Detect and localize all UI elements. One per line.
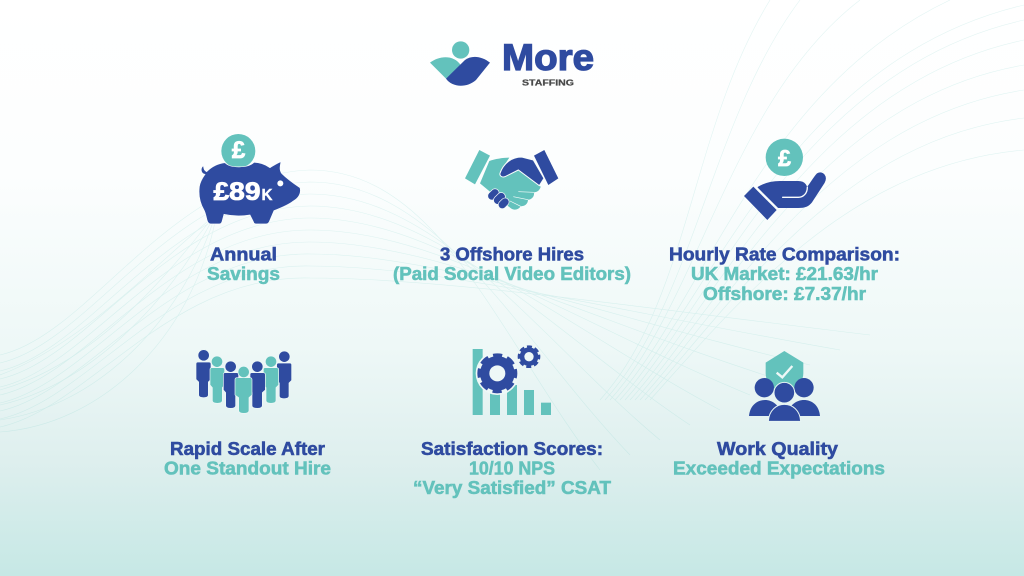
label: hourly rate comparison: Offshore: £7.37/hr <box>703 284 866 304</box>
label: work quality: Exceeded Expectations <box>673 458 885 478</box>
icon: piggy bank with coin: £ <box>232 137 246 164</box>
label: work quality <box>673 439 885 478</box>
label: offshore hires <box>393 244 631 284</box>
icon: piggy bank with coin <box>199 134 300 224</box>
label: hourly rate comparison: Hourly Rate Comparison: <box>669 244 900 264</box>
label: satisfaction scores: 10/10 NPS <box>469 458 555 478</box>
icon: group of people <box>196 350 292 413</box>
icon: bar chart with gears <box>473 347 551 415</box>
icon: hand holding pound coin: £ <box>778 145 791 171</box>
label: annual savings: Annual <box>210 244 277 264</box>
label: annual savings: Savings <box>207 264 280 284</box>
label: rapid scale: Rapid Scale After <box>170 439 325 459</box>
icon: team with shield <box>749 351 820 421</box>
icon: logo mark <box>430 41 490 86</box>
label: work quality: Work Quality <box>717 439 838 459</box>
label: satisfaction scores: “Very Satisfied” CSAT <box>413 478 611 498</box>
icon: piggy bank with coin: K <box>262 187 273 204</box>
label: annual savings <box>207 244 280 284</box>
logo <box>430 37 594 88</box>
label: offshore hires: (Paid Social Video Editors) <box>393 264 631 284</box>
logo subtitle: STAFFING <box>522 78 574 88</box>
label: satisfaction scores <box>413 439 611 498</box>
icon: piggy bank with coin: £89 <box>214 178 260 206</box>
logo wordmark: More <box>502 37 594 78</box>
label: hourly rate comparison <box>669 244 900 304</box>
icon: handshake <box>465 150 558 210</box>
label: rapid scale <box>164 439 331 478</box>
label: rapid scale: One Standout Hire <box>164 458 331 478</box>
label: hourly rate comparison: UK Market: £21.63/hr <box>691 264 878 284</box>
label: satisfaction scores: Satisfaction Scores: <box>421 439 603 459</box>
label: offshore hires: 3 Offshore Hires <box>440 244 584 264</box>
icon: hand holding pound coin <box>744 139 825 220</box>
